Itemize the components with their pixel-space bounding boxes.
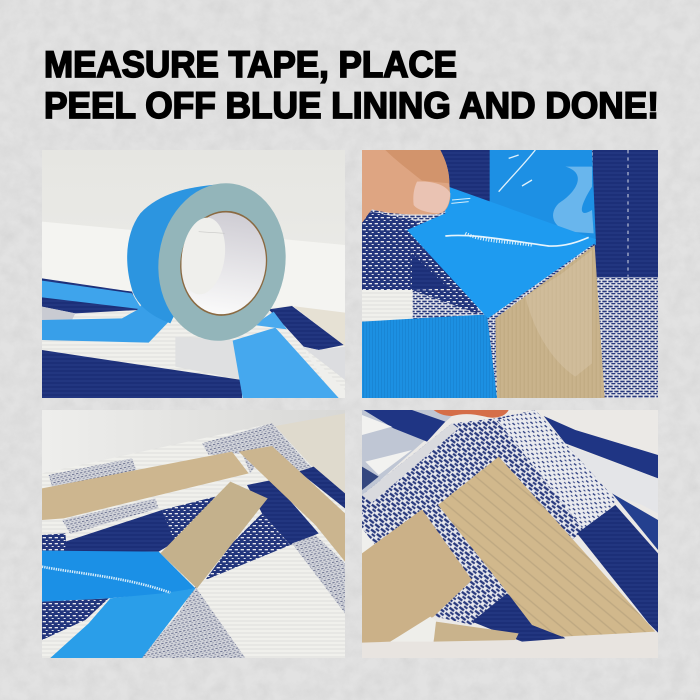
title: MEASURE TAPE, PLACE: [44, 44, 457, 85]
photo: peeling blue liner by hand: [362, 150, 658, 398]
baseboard: [42, 222, 345, 350]
navy areas: [577, 505, 658, 633]
roll of tape: [127, 175, 296, 349]
photo: underside of rug with tan tape: [362, 410, 658, 658]
title: PEEL OFF BLUE LINING AND DONE!: [44, 85, 659, 126]
fold of rug: [362, 410, 616, 625]
blue liner: [50, 588, 195, 658]
photo: tan tape on rug with liner: [42, 410, 345, 658]
background rug left: [362, 410, 459, 497]
blue tape lower left: [362, 314, 497, 398]
rug: [42, 423, 345, 658]
fingers: [434, 410, 509, 418]
blue tape strips: [42, 281, 142, 309]
tan tape pieces: [42, 452, 249, 520]
tan tape pieces: [438, 457, 655, 637]
blue tape top: [490, 150, 596, 245]
tan tape: [495, 245, 605, 398]
rug: [42, 278, 345, 398]
background rug right: [544, 416, 658, 478]
hand: [362, 150, 450, 223]
title: [44, 44, 659, 126]
wall: [42, 410, 345, 658]
peeled blue corner: [407, 185, 596, 318]
photo: tape roll on rug: [42, 150, 345, 398]
floor: [362, 632, 658, 658]
